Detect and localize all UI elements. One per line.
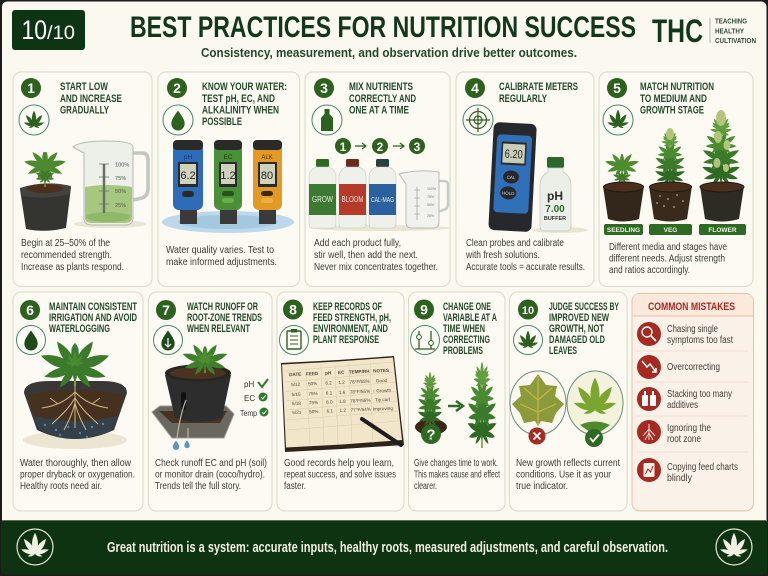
body text: Clean probes and calibrate [466,238,564,249]
icon: leaf [514,326,542,354]
heading [60,81,122,116]
number 5: 5 [613,80,621,96]
body text [465,238,585,273]
record table: FEED [306,371,319,376]
heading: REGULARLY [499,93,547,105]
heading: TO MEDIUM AND [640,93,707,105]
illustration: pot on runoff tray [152,339,234,450]
record table: 75% [309,400,318,405]
record table: 78°F/55% [350,398,371,404]
body text [609,242,727,276]
record table: pH [325,370,332,376]
body text: Give changes time to work. [414,458,498,469]
illustration: seedling pot and beaker [20,141,148,231]
record table: 1.6 [339,390,346,395]
logo: THC [652,13,756,49]
record table: Improving [373,406,393,412]
illustration: seedling plant in pot [602,150,644,222]
measuring beaker: 25% [427,214,434,218]
step sequence 1 to 3: 3 [414,140,421,154]
heading: IMPROVED NEW [549,312,609,324]
panel heading: COMMON MISTAKES [648,301,735,313]
trend checklist: Temp [240,409,257,418]
body text: Different media and stages have [609,242,727,253]
heading: ONE AT A TIME [349,104,409,116]
mistake: copying feed charts: blindly [667,473,692,484]
body text: with fresh solutions. [465,250,540,261]
heading: ROOT-ZONE TRENDS [187,312,262,324]
panel: 3 mix nutrients [305,72,450,286]
meter: ALK [253,140,282,224]
bottle: cal-mag [369,159,396,228]
record table: TEMP/RH [349,369,370,375]
record table: 5/15 [291,392,301,397]
panel: 2 know your water [158,72,300,286]
step sequence 1 to 3: 1 [340,140,347,154]
body text: This makes cause and effect [414,470,500,480]
number 2: 2 [173,80,181,96]
bottle: grow: GROW [312,195,333,204]
stage labels: VEG [664,227,677,234]
heading: PROBLEMS [443,345,483,357]
meter: pH: 6.2 [180,170,196,182]
heading: KNOW YOUR WATER: [202,81,287,93]
trend checklist: pH [244,380,254,389]
body text: and ratios accordingly. [609,265,690,276]
number 8: 8 [289,302,297,318]
number 9 [414,300,434,320]
icon: drop with arrow [154,326,182,354]
illustration: seedling pot and beaker: 25% [115,203,126,209]
meter: ALK: 80 [261,170,273,182]
number 2 [167,78,187,98]
mistake: ignoring root zone: Ignoring the [667,423,711,434]
illustration: pH buffer bottle [532,157,588,233]
illustration: damaged old leaf [510,371,566,444]
record table: 50% [308,381,317,386]
icon: leaf left [17,529,53,565]
number 4 [465,78,485,98]
heading: GROWTH, NOT [549,323,604,335]
body text: Water thoroughly, then allow [20,458,132,469]
logo: THC: HEALTHY [715,28,744,36]
illustration: bottles and beaker [309,159,450,231]
body text: Increase as plants respond. [21,262,124,273]
icon: leaf right [716,529,752,565]
heading: TIME WHEN [443,323,485,335]
stage labels [604,224,746,235]
panel: 9 change one variable [408,292,505,511]
stage labels: SEEDLING [607,227,640,234]
number 3 [314,78,334,98]
heading [313,301,391,346]
meter: pH [173,140,203,224]
icon: sliders [410,326,440,354]
record table: 6.1 [327,408,334,414]
illustration: handheld meter: HOLD [502,190,515,196]
icon: target [463,105,493,135]
body text [166,245,277,268]
illustration: veg plant in pot [649,128,692,222]
panel: 5 match nutrition [599,72,753,286]
record table [289,368,393,415]
logo: THC: CULTIVATION [715,38,756,45]
heading [349,81,416,116]
badge: 10/10: 10 [22,15,47,45]
heading [49,301,137,335]
heading: AND INCREASE [60,93,122,105]
number 6 [20,300,40,320]
body text [21,238,124,273]
body text: or monitor drain (coco/hydro). [155,470,265,480]
good badge [585,429,603,447]
record table: ↑ Growth [373,388,392,394]
pen [362,419,401,445]
record table: 1.8 [339,399,346,404]
body text: conditions. Use it as your [516,470,612,480]
icon: leaf [603,105,633,135]
number 9: 9 [420,302,428,318]
body text: Water quality varies. Test to [166,245,274,256]
step sequence 1 to 3: 2 [377,140,384,154]
number 7 [156,300,176,320]
heading: WATERLOGGING [49,323,110,335]
record table: EC [338,370,345,375]
heading: POSSIBLE [202,116,242,128]
heading: ENVIRONMENT, AND [313,323,388,335]
number 1 [21,78,41,98]
illustration: roots in soil with plant [23,333,127,449]
body text: Never mix concentrates together. [314,262,438,273]
bottle: bloom [339,159,366,228]
record table: NOTES [373,368,389,374]
heading [187,301,262,335]
heading: CALIBRATE METERS [499,81,578,93]
mistake: stacking additives: additives [667,400,698,411]
icon: clipboard [280,326,308,354]
record table: 75% [308,391,318,396]
heading: IRRIGATION AND AVOID [49,312,137,324]
record table: 6.1 [326,390,333,396]
illustration: seedling pot and beaker: 50% [115,189,126,195]
bottle: grow [309,159,336,228]
trend checklist: EC [244,394,255,403]
bottle: bloom: BLOOM [342,195,364,204]
body text: repeat success, and solve issues [284,470,396,480]
record table: 77°F/54% [351,407,371,413]
mistake: ignoring root zone [637,420,711,445]
number 5 [607,78,627,98]
record table: 1.2 [338,380,345,385]
illustration: seedling pot and beaker: 75% [115,176,126,182]
heading [202,81,287,128]
body text: stir well, then add the next. [314,250,418,261]
illustration: healthy new leaf [567,371,623,447]
meter: EC [214,140,242,224]
heading: GROWTH STAGE [640,104,704,116]
illustration: record notebook [281,356,404,452]
body text: faster. [284,481,306,492]
number 3: 3 [320,80,328,96]
mistake: stacking additives: Stacking too many [667,389,732,400]
panel: common mistakes [632,294,754,511]
heading: DAMAGED OLD [549,334,605,346]
body text: Good records help you learn, [284,458,394,469]
meter: pH: pH [184,154,192,161]
body text [284,458,396,492]
heading: WATCH RUNOFF OR [187,301,258,313]
body text: New growth reflects current [516,458,620,469]
step sequence 1 to 3 [335,138,425,154]
heading: START LOW [60,81,108,93]
mistake: ignoring root zone: root zone [667,434,701,445]
body text: Healthy roots need air. [20,481,102,492]
badge: 10/10 [12,10,85,50]
body text [155,458,267,492]
mistake: stacking additives [637,387,732,411]
logo: THC: TEACHING [715,18,747,26]
record table: Good [376,378,388,383]
body text: Check runoff EC and pH (soil) [155,458,267,469]
logo: THC: THC [652,13,703,49]
mistake: overcorrecting [637,355,720,379]
mistake: chasing symptoms: Chasing single [667,324,718,335]
heading: MAINTAIN CONSISTENT [49,301,137,313]
measuring beaker: 100% [427,187,436,191]
header [12,10,756,60]
body text: Trends tell the full story. [155,481,241,492]
meter: EC: 1.2 [220,170,236,182]
number 10 [518,300,538,320]
body text: clearer. [414,481,437,492]
panel: 10 judge success [510,292,627,511]
heading: MIX NUTRIENTS [349,81,413,93]
number 1: 1 [27,80,35,96]
panel: 1 start low [13,72,152,286]
heading: JUDGE SUCCESS BY [549,301,619,313]
badge: 10/10: /10 [47,23,75,44]
body text: recommended strength. [21,250,112,261]
record table: DATE [289,372,301,377]
heading [549,301,619,357]
subtitle: Consistency, measurement, and observation drive better outcomes. [201,45,577,60]
record table: 6.2 [325,380,332,386]
body text [20,458,135,492]
body text: proper dryback or oxygenation. [20,470,135,480]
illustration: handheld meter: 6.20 [504,147,523,162]
body text: Begin at 25–50% of the [21,238,110,249]
illustration: flowering plant in pot [696,110,746,222]
panel: 7 watch runoff [148,292,272,511]
record table: 1.2 [340,408,347,413]
heading: CORRECTING [443,334,490,346]
illustration: plant before change [414,372,447,444]
arrow [448,401,463,411]
body text: Accurate tools = accurate results. [466,262,585,273]
heading: WHEN RELEVANT [187,323,250,335]
heading: PLANT RESPONSE [313,334,379,346]
body text: Add each product fully, [314,238,401,249]
heading: TEST pH, EC, AND [202,93,275,105]
record table: 78°F/55% [350,389,370,395]
record table: 5/21 [292,410,302,415]
heading: CHANGE ONE [443,301,491,313]
measuring beaker [399,171,448,228]
record table: Tip curl [375,397,390,402]
heading [443,301,497,357]
icon: drop [16,326,46,354]
body text: true indicator. [516,481,568,492]
record table: 78°F/55% [349,379,370,385]
heading: KEEP RECORDS OF [313,301,382,313]
illustration: pH buffer bottle: 7.00 [545,204,565,215]
record table: 6.0 [326,399,333,405]
illustration: three test meters in water [162,140,294,233]
mistake: overcorrecting: Overcorrecting [667,362,720,373]
mistake: copying feed charts: Copying feed charts [667,462,738,473]
body text [516,458,620,492]
number 8 [283,300,303,320]
meter: ALK: ALK [261,155,273,161]
illustration: pH buffer bottle: BUFFER [544,216,566,222]
meter: EC: EC [223,154,233,161]
number 4: 4 [471,80,479,96]
mistake: copying feed charts [637,458,738,484]
number 7: 7 [162,302,170,318]
heading: FEED STRENGTH, pH, [313,312,391,324]
illustration: pH buffer bottle: pH [547,189,563,203]
measuring beaker: 75% [427,195,434,199]
illustration: plant after change [463,362,501,448]
bad badge [528,428,546,444]
heading: CORRECTLY AND [349,93,416,105]
illustration: seedling pot and beaker: 100% [115,162,129,168]
icon: water drop [163,105,193,135]
body text: different needs. Adjust strength [609,254,725,264]
stage labels: FLOWER [708,227,737,234]
panel: 4 calibrate meters [456,72,594,286]
heading: MATCH NUTRITION [640,81,714,93]
icon: leaf [19,105,49,135]
illustration: handheld meter: CAL [507,175,516,180]
record table: 5/18 [292,401,301,406]
footer banner [1,520,767,574]
record table: 50% [309,409,319,414]
heading [499,81,578,105]
body text [314,238,438,273]
trend checklist [240,379,268,418]
illustration: handheld meter [488,122,537,232]
number 10: 10 [522,305,534,317]
icon: bottle [312,105,342,135]
mistake: chasing symptoms: symptoms too fast [667,335,733,346]
measuring beaker: 50% [427,203,434,207]
panel: 6 consistent irrigation [13,292,143,511]
number 6: 6 [26,302,34,318]
mistake: chasing symptoms [637,322,733,346]
question badge: ? [426,426,436,444]
heading: GRADUALLY [60,104,109,116]
body text [414,458,500,492]
heading [640,81,714,116]
record table: 5/12 [291,382,301,387]
heading: VARIABLE AT A [443,312,497,324]
heading: ALKALINITY WHEN [202,104,279,116]
body text: make informed adjustments. [166,257,277,268]
panel: 8 keep records [277,292,404,511]
heading: LEAVES [549,345,577,357]
bottle: cal-mag: CAL-MAG [371,197,394,204]
